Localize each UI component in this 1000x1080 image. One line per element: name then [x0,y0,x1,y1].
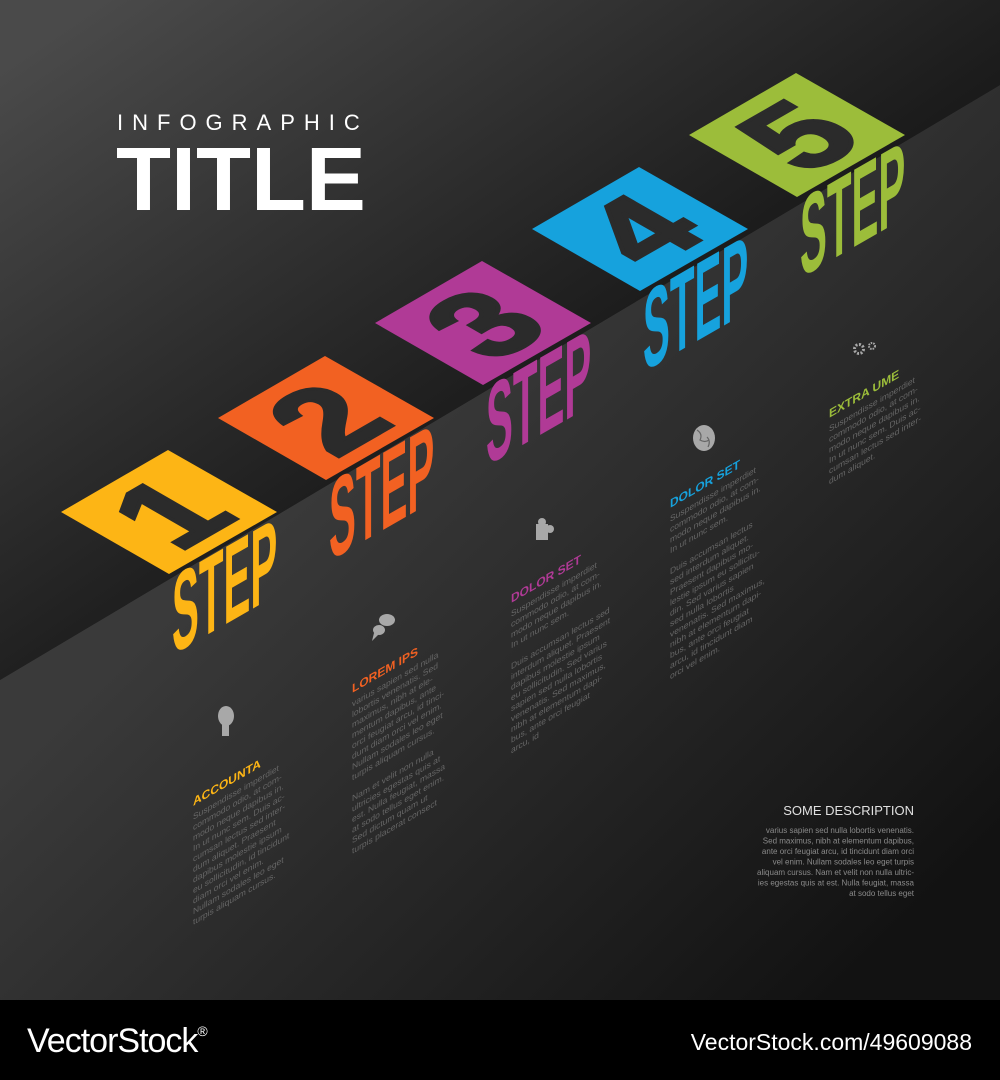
column 4 text: nibh at elementum dapi- [670,588,761,650]
column 4 text: lestie ipsum eu sollicitu- [670,547,760,608]
column 2 text: LOREM IPS [352,644,418,696]
column 4 text: In ut nunc sem. [670,513,728,555]
column 1 text: Nullam sodales leo eget [193,855,284,916]
footer: VectorStock.com/49609088 [691,1029,972,1055]
step 1 [61,450,277,679]
column 2 text: turpis aliquam cursus. [352,725,435,782]
icon: globe [693,425,715,451]
description: SOME DESCRIPTION [783,803,914,818]
step 4 [532,167,748,396]
description: aliquam cursus. Nam et velit non nulla ultric- [757,868,914,877]
column 3 text: commodo odio, at com- [511,569,600,629]
step 3 [375,261,591,490]
column 5 text: Suspendisse imperdiet [829,375,915,434]
column 1 text: turpis aliquam cursus. [193,870,276,927]
column 4 text: bus, ante orci feugiat [670,605,749,660]
icon: gears [854,343,875,354]
column 5 text: dum aliquet. [829,450,875,486]
icon: bulb [218,706,234,736]
step 5: 5 [706,83,892,190]
text: STEP [643,210,748,396]
column 3 text: modo neque dapibus in. [511,578,602,640]
description [757,803,915,898]
column 2 text [352,628,446,856]
column 3 text: dapibus molestie ipsum [511,632,600,692]
column 4 text: commodo odio, at com- [670,474,759,534]
column 3 text: bus, ante orci feugiat [511,690,590,745]
background upper face [0,0,1000,680]
column 3 text: DOLOR SET [511,551,581,606]
column 2 text: mentum dapibus, ante [352,683,436,740]
column 4 text: din. Sed varius sapien [670,561,754,618]
column 1 text: ACCOUNTA [193,755,261,809]
footer: ® [197,1023,208,1039]
column 3 text [511,534,611,755]
step 2: 2 [235,366,421,473]
description: Sed maximus, nibh at elementum dapibus, [763,836,914,846]
column 5 text: cumsan lectus sed inter- [829,413,921,476]
column 4 text: modo neque dapibus in. [670,483,761,545]
column 3 text: nibh at elementum dapi- [511,672,602,734]
column 1 text: modo neque dapibus in. [193,781,284,843]
column 1 text: cumsan lectus sed inter- [193,801,285,864]
step 2 [218,356,434,585]
column 4 text: sed nulla lobortis [670,583,734,629]
step 5 [689,73,905,302]
text: STEP [172,493,277,679]
text: STEP [329,399,434,585]
column 4 text: arcu, id tincidunt diam [670,614,753,671]
column 5 text: modo neque dapibus in. [829,393,920,455]
icon: chat [372,614,395,641]
column 1 text: dapibus molestie ipsum [193,824,282,885]
footer [0,1000,1000,1080]
column 3 text: Suspendisse imperdiet [511,560,597,619]
column 4 text: DOLOR SET [670,456,740,511]
column 2 text: ultricies egestas quis at [352,753,441,814]
column 1 text: dum aliquet. Praesent [193,817,276,874]
title: INFOGRAPHIC [117,110,369,135]
column 2 text: turpis placerat consect [352,797,437,856]
column 2 text: at sodo tellus eget enim. [352,772,444,835]
column 2 text: lobortis venenatis. Sed [352,660,438,719]
column 5 text [829,354,921,486]
column 1 text: diam orci vel enim. [193,856,264,906]
column 2 text: est. Nulla feugiat, massa [352,761,446,824]
column 2 text: Nam et velit non nulla [352,746,434,803]
column 1 text: In ut nunc sem. Duis ac- [193,791,285,853]
column 4 text: sed interdum aliquet. [670,532,749,587]
text: STEP [486,304,591,490]
description: varius sapien sed nulla lobortis venenatis. [766,826,914,835]
description: vel enim. Nullam sodales leo eget turpis [773,858,914,866]
column 3 text: In ut nunc sem. [511,608,569,650]
column 4 text: Suspendisse imperdiet [670,465,756,524]
column 4 text: Duis accumsan lectus [670,519,753,576]
column 5 text: EXTRA UME [829,366,900,421]
description: ante orci feugiat arcu, id tincidunt diam orci [762,847,914,856]
column 1 text: eu sollicitudin, id tincidunt [193,830,290,895]
column 2 text: dunt diam orci vel enim. [352,700,442,761]
column 2 text: varius sapien sed nulla [352,649,439,709]
footer: VectorStock [27,1022,197,1060]
step 1: 1 [78,460,264,567]
column 4 text [670,442,765,681]
column 3 text: venenatis. Sed maximus, [511,660,606,724]
column 4 text: venenatis. Sed maximus, [670,575,765,639]
column 3 text: Duis accumsan lectus sed [511,605,610,671]
icon: puzzle [536,518,554,540]
column 2 text: Sed dictum quam ut [352,792,428,845]
column 3 text: sapien sed nulla lobortis [511,651,602,713]
column 1 text: Suspendisse imperdiet [193,763,279,822]
column 3 text: eu sollicitudin. Sed varius [511,638,607,703]
title: TITLE [116,130,366,230]
column 3 text: arcu, id [511,730,539,755]
column 3 text: interdum aliquet. Praesent [511,615,611,682]
column 5 text: commodo odio, at com- [829,384,918,444]
column 2 text: Nullam sodales leo eget [352,710,443,772]
description: ies egestas quis at est. Nulla feugiat, massa [758,878,915,888]
column 2 text: orci feugiat arcu, id tinci- [352,688,444,751]
column 5 text: In ut nunc sem. Duis ac- [829,403,921,465]
description: at sodo tellus eget [849,889,915,898]
step 4: 4 [549,177,735,284]
column 4 text: Praesent dapibus mo- [670,540,753,597]
column 2 text: maximus, nibh at ele- [352,674,433,730]
step 3: 3 [392,271,578,378]
column 4 text: orci vel enim. [670,643,720,681]
column 1 text [193,739,290,927]
column 1 text: commodo odio, at com- [193,772,282,832]
